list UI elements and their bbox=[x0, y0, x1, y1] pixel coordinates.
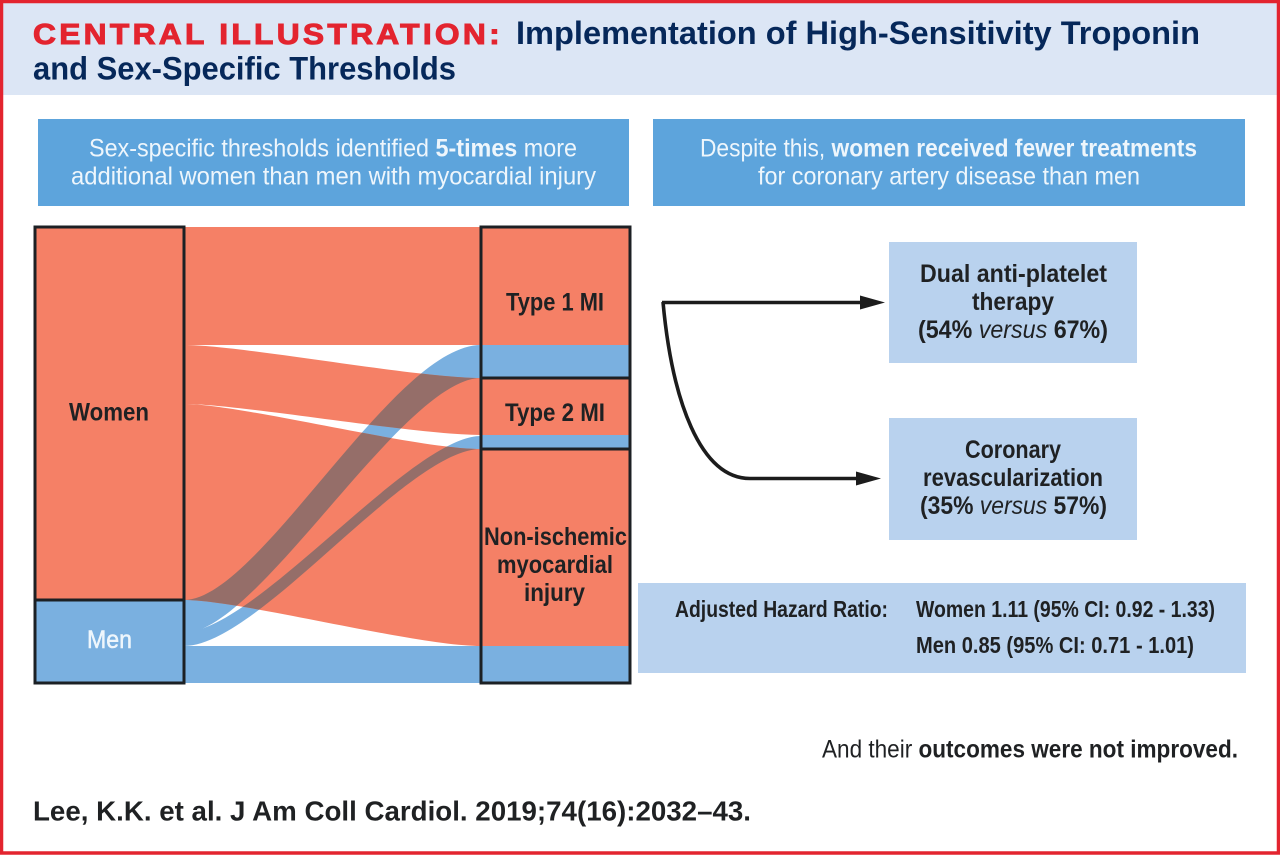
label: men: Men bbox=[87, 626, 132, 654]
outcomes statement: And their outcomes were not improved. bbox=[822, 736, 1238, 764]
panel: adjusted hazard ratio: Adjusted Hazard Ratio: bbox=[675, 596, 888, 622]
citation: Lee, K.K. et al. J Am Coll Cardiol. 2019;74(16):2032–43. bbox=[33, 796, 751, 826]
overlap of men and women flows bbox=[186, 374, 480, 610]
panel: sex-specific thresholds message bbox=[38, 119, 629, 206]
panel: dual anti-platelet therapy: (54% versus 67%) bbox=[918, 316, 1108, 344]
panel: fewer treatments message: Despite this, women received fewer treatments bbox=[700, 134, 1197, 162]
title bbox=[33, 15, 1200, 86]
men block bbox=[35, 600, 184, 683]
panel: dual anti-platelet therapy: therapy bbox=[972, 288, 1054, 316]
label: non-ischemic myocardial injury: Non-ischemic bbox=[484, 523, 627, 551]
panel: adjusted hazard ratio: Men 0.85 (95% CI: 0.71 - 1.01) bbox=[916, 632, 1194, 658]
block outlines bbox=[35, 227, 630, 683]
title: and Sex-Specific Thresholds bbox=[33, 50, 456, 86]
title: CENTRAL ILLUSTRATION: bbox=[33, 19, 503, 51]
outcome column bbox=[481, 227, 630, 683]
panel: coronary revascularization: revascularization bbox=[923, 464, 1103, 492]
panel: coronary revascularization bbox=[889, 418, 1137, 540]
panel: coronary revascularization: Coronary bbox=[965, 436, 1061, 464]
label: non-ischemic myocardial injury: injury bbox=[524, 579, 585, 607]
arrow: to dual anti-platelet therapy bbox=[662, 296, 885, 310]
women block bbox=[35, 227, 184, 600]
panel: fewer treatments message: for coronary artery disease than men bbox=[758, 162, 1140, 190]
panel: dual anti-platelet therapy: Dual anti-platelet bbox=[920, 260, 1108, 288]
sankey diagram bbox=[35, 227, 630, 683]
label: women: Women bbox=[69, 398, 149, 426]
arrow: to coronary revascularization bbox=[663, 302, 881, 486]
panel: adjusted hazard ratio: Women 1.11 (95% CI: 0.92 - 1.33) bbox=[916, 596, 1215, 622]
panel: adjusted hazard ratio bbox=[638, 583, 1246, 673]
panel: coronary revascularization: (35% versus 57%) bbox=[920, 492, 1107, 520]
label: non-ischemic myocardial injury bbox=[484, 523, 627, 607]
panel: sex-specific thresholds message: additional women than men with myocardial injury bbox=[71, 162, 596, 190]
label: type 2 MI: Type 2 MI bbox=[505, 399, 605, 427]
label: type 1 MI: Type 1 MI bbox=[506, 288, 604, 316]
label: non-ischemic myocardial injury: myocardial bbox=[497, 551, 613, 579]
panel: fewer treatments message bbox=[653, 119, 1245, 206]
blue flows from men bbox=[184, 345, 481, 683]
header band bbox=[3, 3, 1277, 95]
panel: sex-specific thresholds message: Sex-specific thresholds identified 5-times more bbox=[89, 134, 577, 162]
red flows from women bbox=[184, 227, 481, 646]
panel: dual anti-platelet therapy bbox=[889, 242, 1137, 363]
title: Implementation of High-Sensitivity Troponin bbox=[516, 15, 1200, 51]
